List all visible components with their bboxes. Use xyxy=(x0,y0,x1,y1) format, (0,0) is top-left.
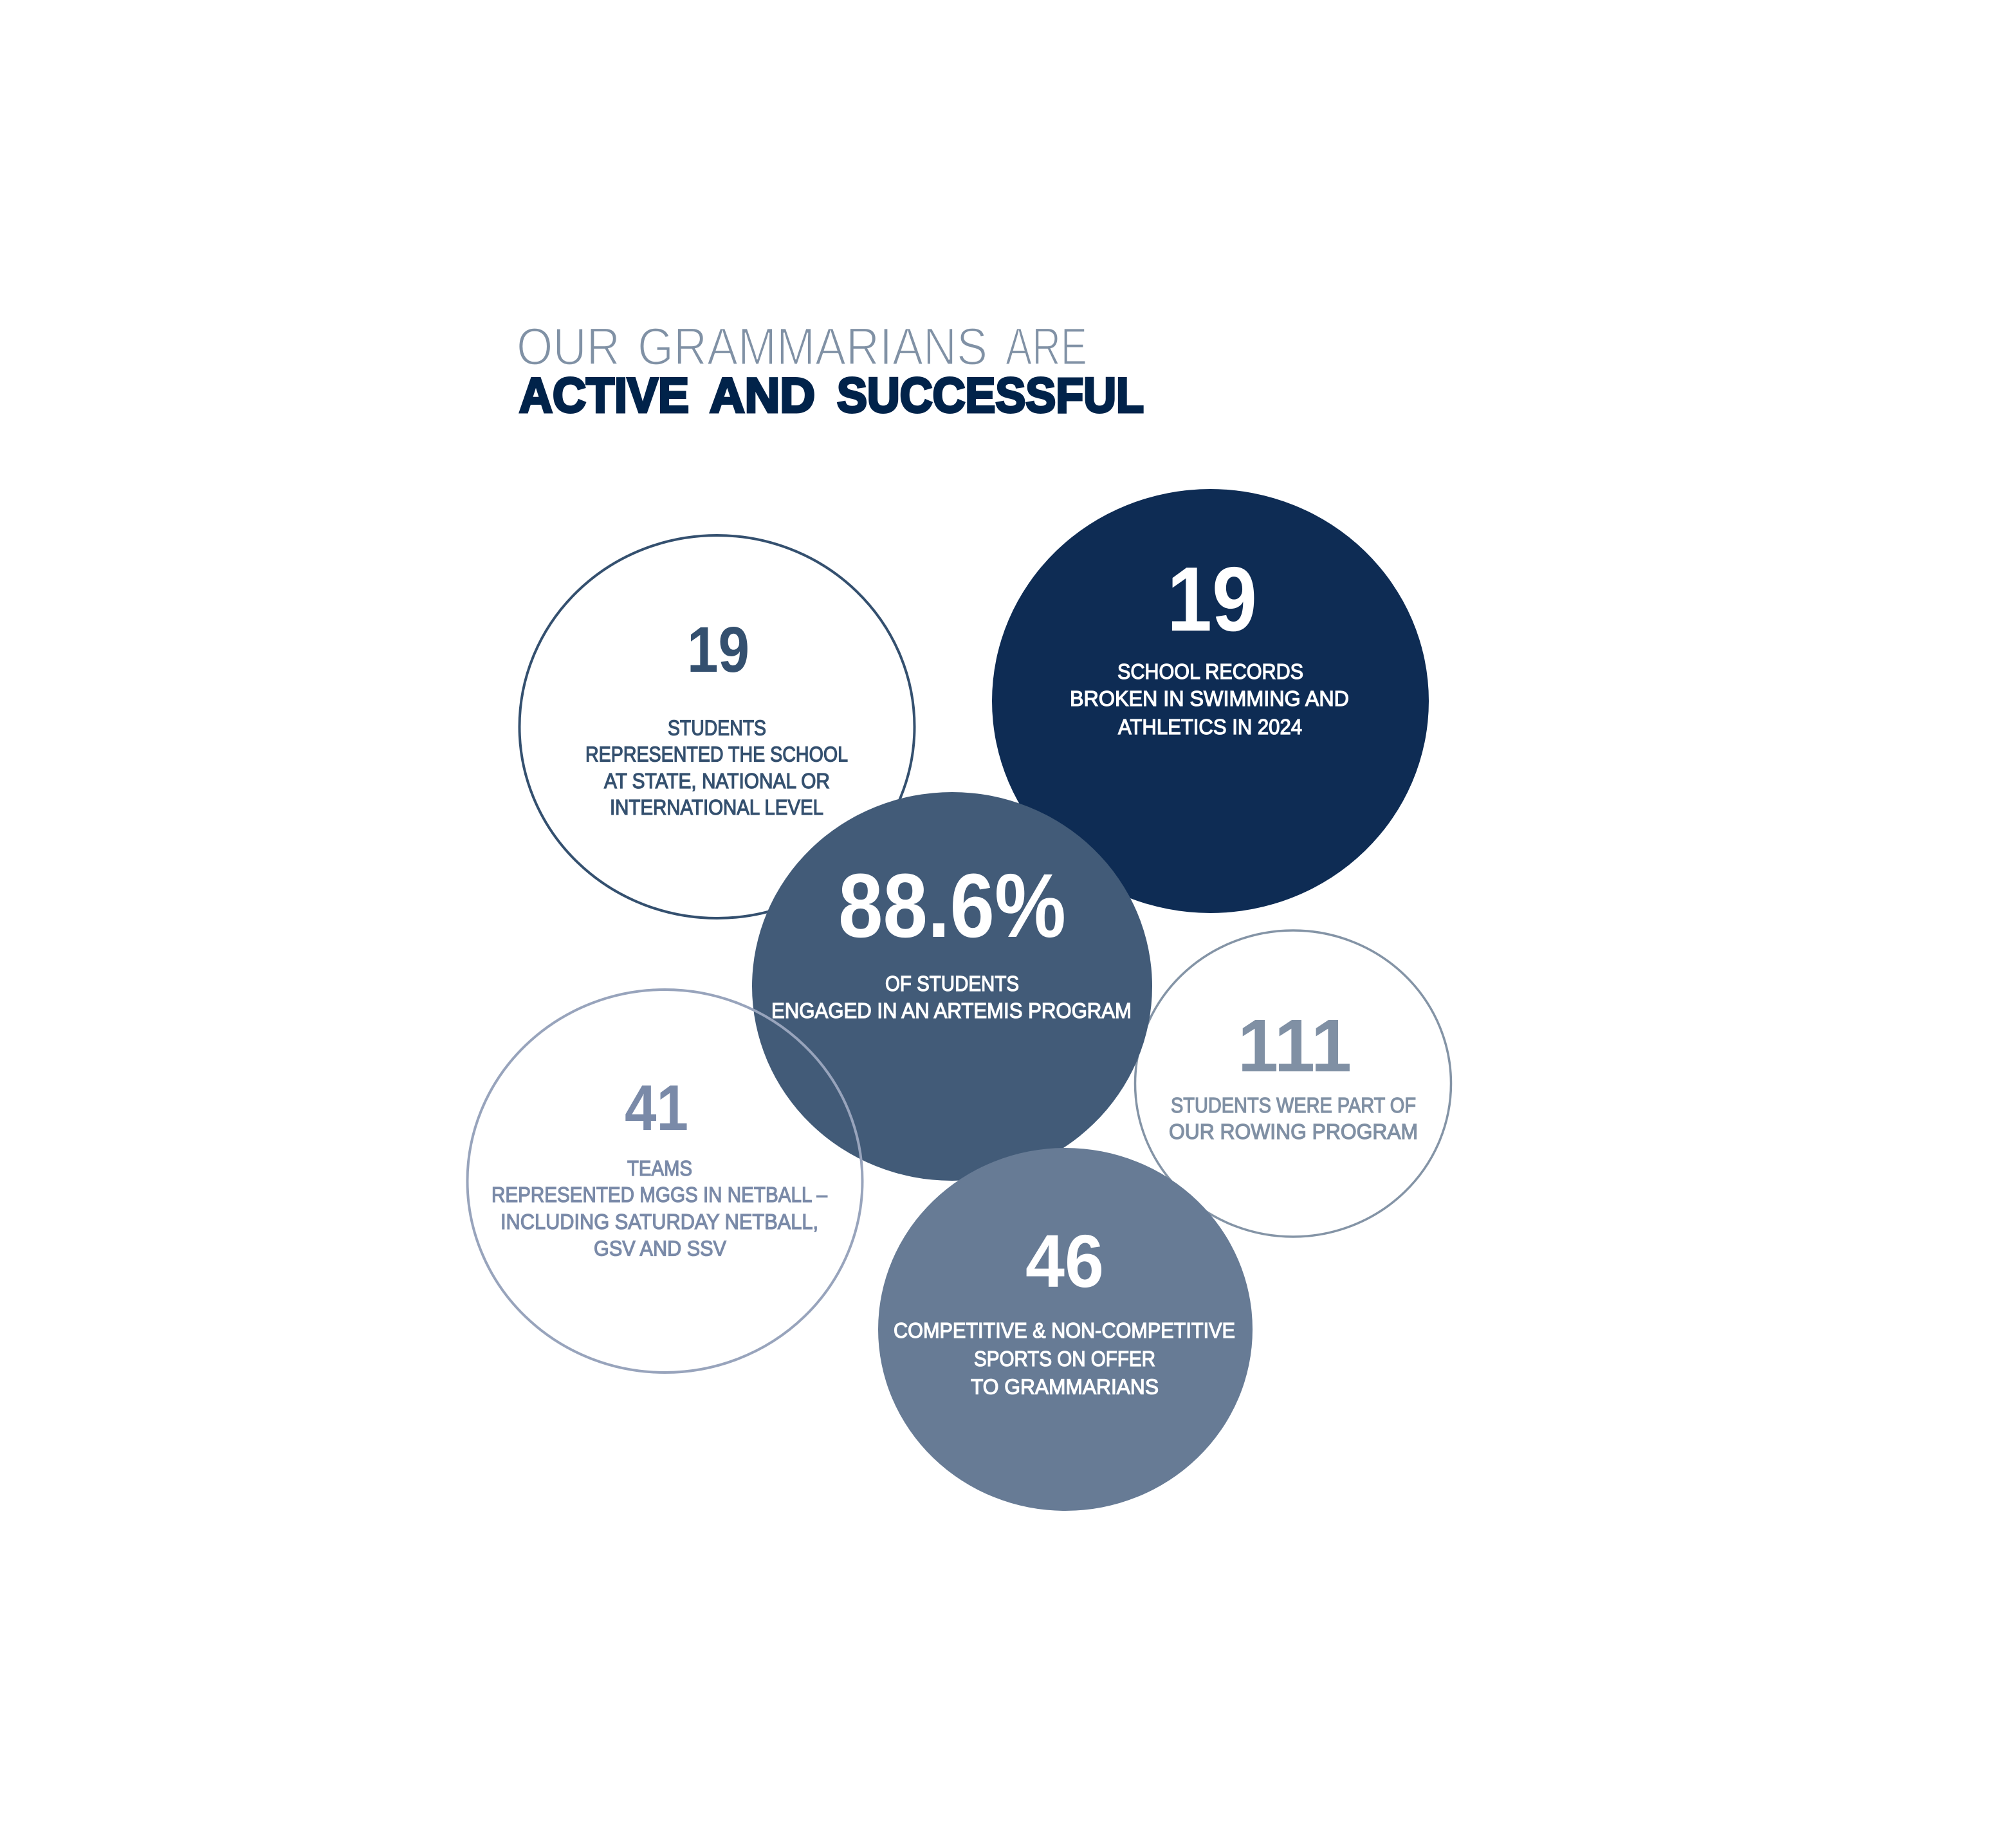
panel: 111 rowing students xyxy=(1135,930,1451,1237)
filled circle xyxy=(992,489,1429,913)
label: BROKEN IN SWIMMING AND xyxy=(1070,687,1349,711)
title line 2 xyxy=(519,368,1144,423)
panel: 88.6% of students xyxy=(752,792,1152,1181)
number: 19 xyxy=(1167,548,1257,651)
title line 1 xyxy=(517,318,1087,376)
panel: 19 school records xyxy=(992,489,1429,913)
number: 111 xyxy=(1238,1004,1352,1087)
number: 46 xyxy=(1025,1219,1104,1303)
number: 41 xyxy=(625,1072,688,1144)
label xyxy=(771,972,1132,1023)
panel: 41 netball teams xyxy=(467,990,862,1372)
panel: 46 sports xyxy=(878,1148,1253,1511)
label xyxy=(1169,1094,1418,1144)
label: OF STUDENTS xyxy=(885,972,1019,996)
number: 19 xyxy=(687,614,749,686)
outline circle xyxy=(520,535,915,918)
label: REPRESENTED THE SCHOOL xyxy=(585,743,848,767)
panel: 19 students represented xyxy=(520,535,915,918)
label xyxy=(1070,660,1349,739)
label xyxy=(491,1157,827,1261)
label: INTERNATIONAL LEVEL xyxy=(610,796,823,820)
title line 2: SUCCESSFUL xyxy=(837,368,1144,423)
label: INCLUDING SATURDAY NETBALL, xyxy=(500,1210,818,1234)
filled circle xyxy=(752,792,1152,1181)
outline circle xyxy=(467,990,862,1372)
label: OUR ROWING PROGRAM xyxy=(1169,1120,1418,1144)
label: ENGAGED IN AN ARTEMIS PROGRAM xyxy=(771,999,1132,1023)
label: COMPETITIVE & NON-COMPETITIVE xyxy=(894,1319,1235,1343)
label: GSV AND SSV xyxy=(594,1237,727,1261)
outline circle xyxy=(1135,930,1451,1237)
label: TEAMS xyxy=(627,1157,692,1181)
label: ATHLETICS IN 2024 xyxy=(1118,716,1302,739)
label: AT STATE, NATIONAL OR xyxy=(604,770,830,793)
title xyxy=(517,318,1144,423)
filled circle xyxy=(878,1148,1253,1511)
label: SCHOOL RECORDS xyxy=(1117,660,1303,684)
title line 1: GRAMMARIANS xyxy=(638,318,987,376)
label xyxy=(585,717,848,820)
label xyxy=(894,1319,1235,1399)
label: STUDENTS WERE PART OF xyxy=(1171,1094,1416,1118)
label: TO GRAMMARIANS xyxy=(971,1376,1159,1399)
label: STUDENTS xyxy=(668,717,766,740)
label: REPRESENTED MGGS IN NETBALL – xyxy=(491,1183,827,1207)
title line 2: ACTIVE xyxy=(519,368,689,423)
title line 2: AND xyxy=(710,368,815,423)
label: SPORTS ON OFFER xyxy=(974,1347,1155,1371)
number: 88.6% xyxy=(838,855,1066,956)
title line 1: OUR xyxy=(517,318,620,376)
title line 1: ARE xyxy=(1006,318,1087,376)
